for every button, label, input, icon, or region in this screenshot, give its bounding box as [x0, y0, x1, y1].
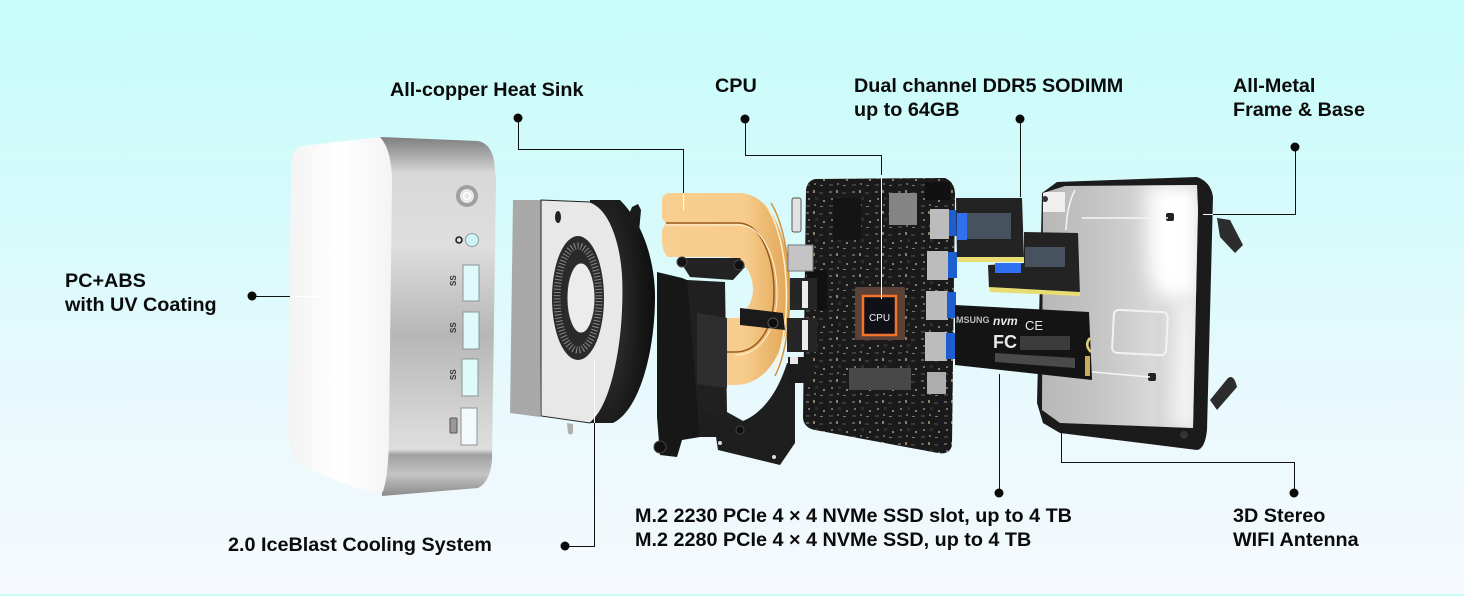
icon: M.2 SSD: FC [993, 332, 1017, 352]
antennas [1210, 218, 1243, 410]
label: M.2 SSD: M.2 2230 PCIe 4 × 4 NVMe SSD slot, up to 4 TB [635, 505, 1072, 527]
label: DDR5 SODIMM: Dual channel DDR5 SODIMM [854, 75, 1123, 97]
icon: copper heat sink [662, 193, 790, 385]
power button [456, 185, 478, 207]
label: PC+ABS with UV Coating: PC+ABS [65, 270, 146, 292]
label: All-Metal Frame & Base: All-Metal [1233, 75, 1315, 97]
label: CPU: CPU [715, 75, 757, 97]
USB ports: SS [449, 322, 458, 333]
label: DDR5 SODIMM: up to 64GB [854, 99, 960, 121]
label: 3D Stereo WIFI Antenna: WIFI Antenna [1233, 529, 1360, 551]
icon: CPU chip [855, 287, 905, 340]
icon: M.2 SSD [955, 305, 1092, 380]
icon: heat sink bracket [654, 257, 795, 465]
icon: M.2 SSD: MSUNG [956, 315, 990, 325]
icon: DDR5 memory modules [956, 198, 1080, 296]
USB ports [449, 265, 479, 445]
USB ports: SS [449, 275, 458, 286]
label: All-copper Heat Sink: All-copper Heat Sink [390, 79, 584, 101]
silver case body [380, 137, 496, 496]
right side USB ports [925, 209, 958, 394]
label: PC+ABS with UV Coating: with UV Coating [64, 294, 217, 316]
audio jack [456, 234, 478, 246]
icon: CPU chip: CPU [869, 313, 890, 324]
callout lines [252, 118, 1296, 546]
label: All-Metal Frame & Base: Frame & Base [1233, 99, 1365, 121]
label: M.2 SSD: M.2 2280 PCIe 4 × 4 NVMe SSD, up to 4 TB [635, 529, 1031, 551]
panel: motherboard [787, 178, 958, 453]
icon: cooling fan [510, 200, 655, 434]
panel: metal frame and base [1037, 177, 1243, 450]
icon: M.2 SSD: CE [1025, 318, 1043, 333]
label: 3D Stereo WIFI Antenna: 3D Stereo [1233, 505, 1325, 527]
USB ports: SS [449, 369, 458, 380]
label: 2.0 IceBlast Cooling System: 2.0 IceBlast Cooling System [228, 534, 492, 556]
panel: front case [288, 137, 496, 496]
white front cover [288, 137, 392, 495]
icon: M.2 SSD: nvm [993, 314, 1018, 328]
callout dots [248, 114, 1300, 550]
left side connectors [787, 198, 817, 383]
